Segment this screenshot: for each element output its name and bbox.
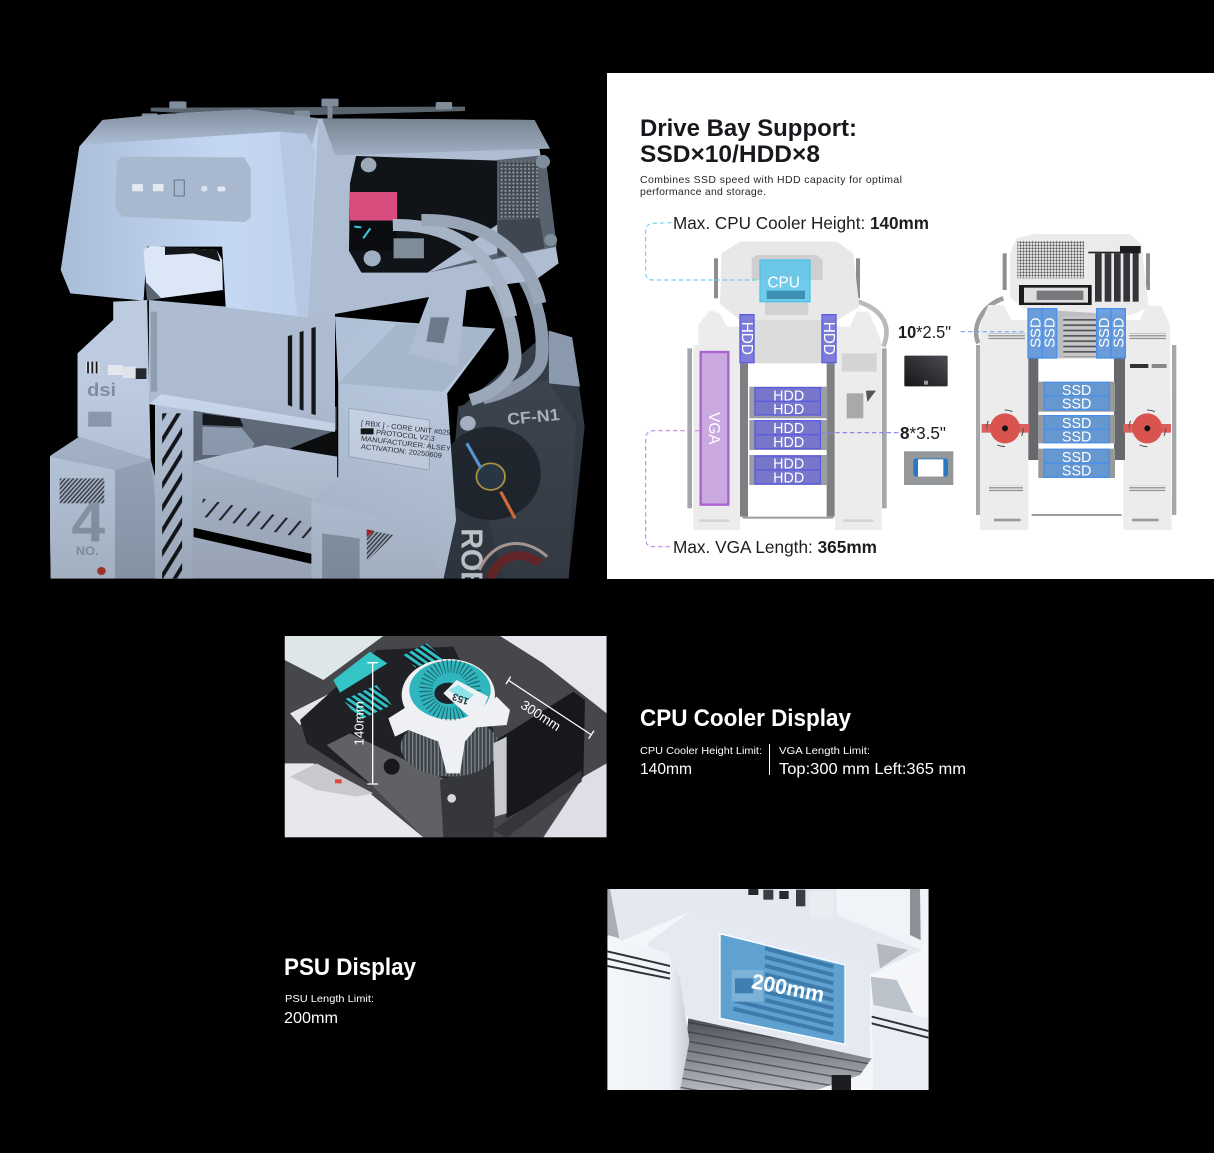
backdrop and upper shelf <box>607 889 929 1090</box>
HDD tray labels: HDD <box>773 457 804 473</box>
case surroundings <box>285 636 607 837</box>
HDD tray labels: HDD <box>773 435 804 451</box>
spec plate: PROTOCOL V2.3 <box>375 428 435 443</box>
spec: VGA length limit: Top:300 mm Left:365 mm <box>779 761 966 778</box>
HDD tray labels: HDD <box>773 470 804 486</box>
HDD vertical labels: HDD <box>820 322 837 355</box>
PSU length label: 200mm <box>750 969 826 1007</box>
left body column: dsi <box>87 380 116 401</box>
CPU zone highlight <box>760 260 810 302</box>
CPU zone highlight: CPU <box>767 274 800 291</box>
spec plate <box>349 408 456 470</box>
underside mesh <box>680 1018 872 1090</box>
center block and frame <box>1028 308 1125 516</box>
left body block <box>607 937 689 1090</box>
head unit <box>720 242 859 320</box>
center drive trays <box>192 407 337 579</box>
SSD tray labels: SSD <box>1062 450 1091 466</box>
spec: PSU length limit <box>284 993 374 1027</box>
side window with interior <box>349 155 557 273</box>
HDD tray labels: HDD <box>773 388 804 404</box>
tray and screw area <box>327 733 493 837</box>
SSD tray labels: SSD <box>1062 429 1091 445</box>
label: 10 x 2.5 inch: 10*2.5" <box>898 322 951 342</box>
SSD vertical labels: SSD <box>1111 318 1127 348</box>
rails and tube <box>687 258 887 508</box>
SSD tray labels: SSD <box>1062 396 1091 412</box>
side columns <box>980 305 1172 530</box>
HDD tray labels <box>773 388 804 486</box>
VGA zone highlight <box>701 352 728 505</box>
SSD vertical labels: SSD <box>1097 318 1113 348</box>
description text: performance and storage. <box>640 186 766 198</box>
label: max VGA length: Max. VGA Length: 365mm <box>673 537 877 557</box>
HDD vertical labels: HDD <box>738 322 755 355</box>
spec: CPU cooler height limit <box>640 745 762 778</box>
spec: PSU length limit: 200mm <box>284 1010 338 1027</box>
graphics card <box>493 692 585 837</box>
head unit <box>1010 234 1149 315</box>
right body <box>311 317 495 579</box>
SSD leader line <box>961 330 1023 333</box>
photo: CPU cooler <box>285 636 607 837</box>
description text <box>640 174 902 198</box>
cooler: 153 <box>451 690 471 706</box>
cooler <box>388 659 510 777</box>
foreground tube sections <box>393 220 540 317</box>
lower bolts and shading <box>50 416 571 578</box>
cyan memory heatsinks <box>333 643 444 720</box>
left body column <box>49 300 183 579</box>
heading: Drive Bay Support <box>640 115 857 168</box>
SSD vertical labels <box>1028 318 1127 348</box>
red fan highlight left <box>982 410 1029 447</box>
white drive-bay panel <box>607 73 1214 579</box>
icon: 3.5 inch HDD <box>904 451 953 485</box>
heading: CPU Cooler Display: CPU Cooler Display <box>640 705 852 732</box>
heading: Drive Bay Support: SSD×10/HDD×8 <box>640 141 820 168</box>
heading: Drive Bay Support: Drive Bay Support: <box>640 115 857 142</box>
spec: CPU cooler height limit: CPU Cooler Height Limit: <box>640 745 762 757</box>
red fan highlight right <box>1123 410 1171 447</box>
spec plate: ACTIVATION: 20250609 <box>360 442 442 460</box>
HDD tray labels: HDD <box>773 421 804 437</box>
SSD tray labels: SSD <box>1062 416 1091 432</box>
SSD tray labels: SSD <box>1062 383 1091 399</box>
left body column: NO. <box>76 544 99 558</box>
rear dark fan panel: ROB <box>454 528 488 592</box>
dimension: 300mm <box>506 677 594 739</box>
spec plate: [ RBX ] - CORE UNIT #025 <box>360 418 451 437</box>
HDD vertical bays <box>740 315 836 363</box>
spec: CPU cooler height limit: 140mm <box>640 761 692 778</box>
PSU box <box>149 300 335 432</box>
rails and tube <box>976 253 1176 515</box>
leader lines <box>646 223 898 547</box>
PSU box <box>647 912 870 1058</box>
dimension: 300mm: 300mm <box>518 697 564 734</box>
description text: Combines SSD speed with HDD capacity for optimal <box>640 174 902 186</box>
top mounting frame <box>142 99 465 120</box>
louvers and barcode <box>988 333 1167 521</box>
VGA zone highlight: VGA <box>705 412 722 445</box>
center block and frame <box>699 315 877 522</box>
rear dark fan panel <box>441 331 585 592</box>
head unit <box>61 109 559 317</box>
SSD vertical labels: SSD <box>1043 318 1059 348</box>
dimension: 140mm <box>354 662 378 785</box>
right bracket and block <box>871 977 928 1090</box>
PSU blue highlight <box>720 934 845 1044</box>
spec: PSU length limit: PSU Length Limit: <box>285 993 374 1005</box>
HDD tray labels: HDD <box>773 402 804 418</box>
dimension: 140mm: 140mm <box>351 701 366 746</box>
heading: PSU Display: PSU Display <box>284 954 417 981</box>
label: max CPU cooler height: Max. CPU Cooler Height: 140mm <box>673 213 929 233</box>
rear dark fan panel: CF-N1 <box>506 404 561 429</box>
HDD vertical labels <box>738 322 837 355</box>
SSD tray labels <box>1062 383 1091 480</box>
icon: 2.5 inch SSD <box>904 356 948 386</box>
spec: VGA length limit <box>779 745 966 778</box>
handle notch <box>144 246 223 301</box>
side columns <box>693 310 882 530</box>
SSD tray labels: SSD <box>1062 464 1091 480</box>
label: 8 x 3.5 inch: 8*3.5" <box>900 423 946 443</box>
rear coolant tube sections <box>468 282 549 406</box>
motherboard <box>300 646 494 786</box>
left body column: 4 <box>71 491 106 554</box>
diagram: rear view of case <box>961 234 1176 530</box>
photo: PSU bay <box>607 889 929 1090</box>
SSD vertical labels: SSD <box>1028 318 1044 348</box>
SSD trays <box>1044 382 1109 477</box>
hero image: PC case, three-quarter view <box>49 99 590 592</box>
I/O port panel <box>115 157 251 222</box>
HDD trays <box>755 388 820 484</box>
spec: VGA length limit: VGA Length Limit: <box>779 745 870 757</box>
diagram: front view of case <box>646 223 953 547</box>
spec plate: MANUFACTURER: ALSEYE <box>360 434 456 453</box>
mounting bracket <box>419 290 466 344</box>
striped side column <box>155 405 194 580</box>
SSD vertical bays <box>1028 309 1125 358</box>
